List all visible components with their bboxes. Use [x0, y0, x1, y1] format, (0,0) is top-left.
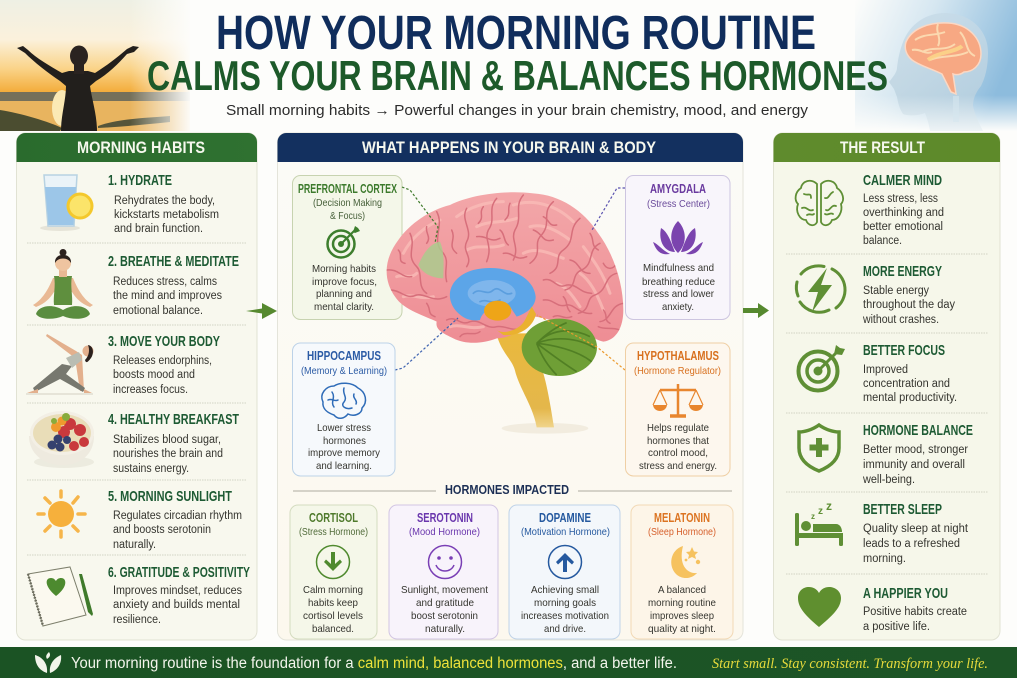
result: more energy: MORE ENERGY: [863, 263, 942, 280]
habit 2: breathe and meditate: emotional balance.: [113, 305, 203, 317]
callout: hypothalamus: [626, 343, 730, 476]
card: dopamine: (Motivation Hormone): [521, 526, 610, 538]
heading: hormones impacted: HORMONES IMPACTED: [445, 483, 569, 497]
callout: hippocampus: [292, 343, 395, 476]
callout: hippocampus: HIPPOCAMPUS: [307, 348, 381, 363]
callout: amygdala: stress and lower: [643, 288, 714, 300]
callout: hippocampus: improve memory: [308, 447, 381, 459]
callout: amygdala: breathing reduce: [642, 276, 715, 288]
card: serotonin: naturally.: [425, 623, 465, 635]
result: better sleep: leads to a refreshed: [863, 538, 960, 550]
callout: prefrontal cortex: Morning habits: [312, 263, 376, 275]
card: dopamine: Achieving small: [531, 584, 599, 596]
result: hormone balance: immunity and overall: [863, 459, 965, 471]
callout: amygdala: AMYGDALA: [650, 181, 706, 196]
callout: hypothalamus: HYPOTHALAMUS: [637, 348, 719, 363]
title: [147, 7, 888, 99]
callout: hypothalamus: control mood,: [648, 447, 708, 459]
icon: person sleeping in bed: z: [811, 512, 815, 521]
card: dopamine: increases motivation: [521, 610, 609, 622]
icon: leaves: [35, 652, 61, 673]
result: better sleep: BETTER SLEEP: [863, 501, 942, 518]
habit 5: morning sunlight: 5. MORNING SUNLIGHT: [108, 488, 232, 505]
icon: person sleeping in bed: z: [818, 506, 823, 517]
footer tagline: Start small. Stay consistent. Transform your life.: [712, 656, 988, 672]
card: serotonin: SEROTONIN: [417, 510, 473, 525]
card: dopamine: morning goals: [534, 597, 596, 609]
habit 4: healthy breakfast: 4. HEALTHY BREAKFAST: [108, 411, 239, 428]
card: dopamine: and drive.: [544, 623, 586, 635]
card: serotonin: Sunlight, movement: [401, 584, 488, 596]
habit 3: move your body: increases focus.: [113, 384, 188, 396]
result: calmer mind: [796, 172, 944, 247]
connector lines: [395, 187, 625, 370]
card: cortisol: habits keep: [308, 597, 358, 609]
callout: prefrontal cortex: improve focus,: [312, 276, 377, 288]
habit 2: breathe and meditate: [33, 249, 239, 319]
callout: prefrontal cortex: mental clarity.: [314, 301, 374, 313]
callout: prefrontal cortex: PREFRONTAL CORTEX: [298, 181, 397, 196]
icon: heart: [798, 587, 841, 627]
habit 6: gratitude and positivity: Improves mindset, reduces: [113, 585, 242, 597]
footer message: Your morning routine is the foundation for a calm mind, balanced hormones, and a better life.: [71, 655, 677, 672]
icon: shield with cross: [799, 425, 839, 471]
habit 6: gratitude and positivity: 6. GRATITUDE & POSITIVITY: [108, 564, 250, 581]
card: serotonin: [389, 505, 498, 639]
habit 4: healthy breakfast: sustains energy.: [113, 463, 189, 475]
result: a happier you: a positive life.: [863, 621, 930, 633]
card: serotonin: and gratitude: [416, 597, 474, 609]
result: more energy: throughout the day: [863, 299, 955, 311]
icon: notebook with heart and pen: [28, 567, 93, 626]
result: more energy: Stable energy: [863, 285, 929, 297]
icon: smiley face: [428, 546, 462, 578]
result: better focus: BETTER FOCUS: [863, 342, 945, 359]
callout: hypothalamus: stress and energy.: [639, 460, 717, 472]
card: cortisol: balanced.: [312, 623, 354, 635]
heading: morning habits: MORNING HABITS: [77, 138, 205, 157]
card: melatonin: [631, 505, 733, 639]
habit 5: morning sunlight: and boosts serotonin: [113, 524, 211, 536]
arrow: habits to brain: [246, 303, 277, 319]
result: better sleep: Quality sleep at night: [863, 523, 969, 535]
result: better focus: mental productivity.: [863, 392, 957, 404]
icon: lotus: [653, 221, 703, 254]
habit 3: move your body: boosts mood and: [113, 369, 195, 381]
card: serotonin: (Mood Hormone): [409, 526, 480, 538]
icon: up arrow in circle: [548, 546, 582, 578]
icon: glass of water with lemon: [40, 175, 94, 231]
heading: the result: THE RESULT: [840, 138, 925, 157]
card: cortisol: [290, 505, 377, 639]
panel: morning habits: [16, 133, 257, 640]
photo: head silhouette with glowing brain: [855, 0, 1017, 131]
habit 6: gratitude and positivity: resilience.: [113, 614, 161, 626]
card: melatonin: A balanced: [658, 584, 706, 596]
habit 6: gratitude and positivity: anxiety and builds mental: [113, 599, 240, 611]
callout: hypothalamus: Helps regulate: [647, 422, 709, 434]
icon: person sleeping in bed: z: [826, 499, 832, 513]
callout: hippocampus: and learning.: [316, 460, 372, 472]
result: calmer mind: CALMER MIND: [863, 172, 942, 189]
habit 3: move your body: 3. MOVE YOUR BODY: [108, 333, 220, 350]
icon: target with arrow: [798, 345, 845, 390]
habit 6: gratitude and positivity: [28, 564, 250, 626]
card: cortisol: Calm morning: [303, 584, 363, 596]
card: melatonin: improves sleep: [650, 610, 714, 622]
card: dopamine: DOPAMINE: [539, 510, 591, 525]
habit 5: morning sunlight: [38, 488, 242, 551]
icon: moon and stars: [671, 546, 700, 578]
icon: target: [328, 226, 360, 258]
callout: hippocampus: hormones: [323, 435, 366, 447]
result: a happier you: A HAPPIER YOU: [863, 585, 948, 602]
habit 3: move your body: Releases endorphins,: [113, 355, 212, 367]
result: more energy: [796, 263, 955, 326]
result: calmer mind: better emotional: [863, 221, 943, 233]
title: HOW YOUR MORNING ROUTINE: [216, 7, 816, 60]
icon: meditating woman: [33, 249, 93, 319]
result: hormone balance: [799, 422, 973, 486]
result: calmer mind: overthinking and: [863, 207, 944, 219]
icon: brain hemispheres: [796, 181, 843, 225]
prefrontal highlighted area: [418, 242, 444, 278]
habit 1: hydrate: and brain function.: [114, 223, 203, 235]
habit 1: hydrate: kickstarts metabolism: [114, 209, 219, 221]
panel: what happens in your brain and body: [278, 133, 743, 640]
habit 4: healthy breakfast: nourishes the brain and: [113, 448, 223, 460]
result: more energy: without crashes.: [862, 314, 939, 326]
callout: amygdala: [626, 176, 730, 320]
result: better sleep: morning.: [863, 553, 906, 565]
result: calmer mind: Less stress, less: [863, 193, 938, 205]
callout: amygdala: (Stress Center): [647, 198, 710, 210]
callout: hypothalamus: (Hormone Regulator): [634, 365, 721, 377]
card: cortisol: cortisol levels: [303, 610, 363, 622]
cerebellum: [522, 319, 597, 376]
arrow: brain to result: [743, 303, 769, 318]
callout: hippocampus: (Memory & Learning): [301, 365, 387, 377]
result: a happier you: Positive habits create: [863, 606, 967, 618]
result: calmer mind: balance.: [863, 235, 902, 247]
callout: amygdala: Mindfulness and: [643, 262, 714, 274]
card: cortisol: (Stress Hormone): [299, 526, 368, 538]
panel: the result: [774, 133, 1000, 640]
result: better focus: Improved: [863, 364, 908, 376]
callout: hippocampus: Lower stress: [317, 422, 371, 434]
heading: what happens: WHAT HAPPENS IN YOUR BRAIN & BODY: [362, 138, 657, 157]
card: cortisol: CORTISOL: [309, 510, 358, 525]
icon: balance scales: [653, 384, 703, 416]
result: better sleep: [795, 499, 969, 565]
card: serotonin: boost serotonin: [411, 610, 478, 622]
result: better focus: concentration and: [863, 378, 950, 390]
footer banner: [0, 647, 1017, 678]
card: melatonin: (Sleep Hormone): [648, 526, 716, 538]
icon: yoga triangle pose: [26, 334, 94, 394]
habit 5: morning sunlight: Regulates circadian rhythm: [113, 510, 242, 522]
callout: prefrontal cortex: (Decision Making: [313, 197, 382, 209]
icon: down arrow in circle: [316, 546, 350, 578]
icon: brain outline: [322, 383, 365, 418]
card: melatonin: morning routine: [648, 597, 716, 609]
icon: sun: [38, 491, 85, 537]
habit 5: morning sunlight: naturally.: [113, 539, 156, 551]
callout: amygdala: anxiety.: [662, 301, 694, 313]
subtitle: Small morning habits → Powerful changes in your brain chemistry, mood, and energy: [226, 102, 809, 119]
habit 1: hydrate: [40, 172, 219, 235]
habit 2: breathe and meditate: 2. BREATHE & MEDITATE: [108, 253, 239, 270]
result: hormone balance: HORMONE BALANCE: [863, 422, 973, 439]
habit 2: breathe and meditate: Reduces stress, calms: [113, 276, 217, 288]
callout: prefrontal cortex: planning and: [316, 288, 372, 300]
icon: lightning in ring: [796, 266, 845, 312]
habit 2: breathe and meditate: the mind and improves: [113, 290, 222, 302]
habit 4: healthy breakfast: Stabilizes blood sugar,: [113, 434, 221, 446]
result: hormone balance: well-being.: [862, 474, 915, 486]
card: melatonin: quality at night.: [648, 623, 716, 635]
habit 1: hydrate: 1. HYDRATE: [108, 172, 172, 189]
callout: prefrontal cortex: & Focus): [330, 210, 365, 222]
callout: hypothalamus: hormones that: [647, 435, 709, 447]
result: a happier you: [798, 585, 967, 633]
habit 1: hydrate: Rehydrates the body,: [114, 195, 215, 207]
callout: prefrontal cortex: [292, 176, 402, 320]
icon: breakfast bowl with fruit: [29, 411, 94, 468]
thalamus and midbrain: [497, 307, 536, 335]
illustration: brain anatomy: [387, 192, 623, 434]
card: melatonin: MELATONIN: [654, 510, 710, 525]
icon: person sleeping in bed: [795, 499, 843, 546]
card: dopamine: [509, 505, 620, 639]
photo: woman greeting the sunrise: [0, 0, 194, 131]
habit 4: healthy breakfast: [29, 411, 239, 475]
result: hormone balance: Better mood, stronger: [863, 444, 968, 456]
habit 3: move your body: [26, 333, 220, 396]
result: better focus: [798, 342, 957, 404]
limbic arc: [450, 268, 536, 320]
